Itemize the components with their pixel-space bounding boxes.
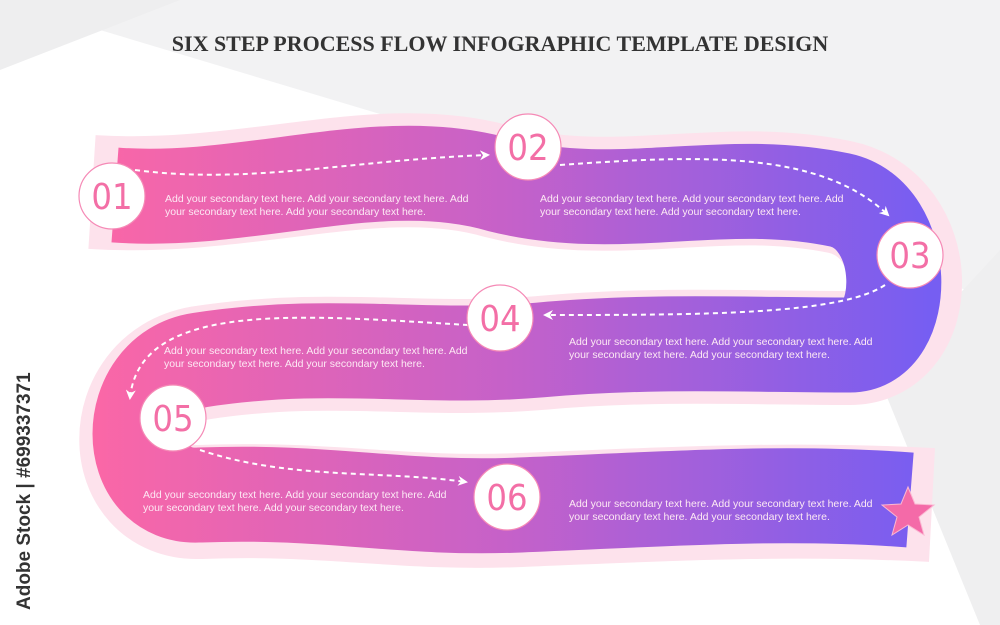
step texts: your secondary text here. Add your secondary text here. (569, 511, 830, 523)
step texts: your secondary text here. Add your secondary text here. (143, 502, 404, 514)
step texts: your secondary text here. Add your secondary text here. (569, 349, 830, 361)
step texts: Add your secondary text here. Add your secondary text here. Add (540, 193, 844, 205)
step texts (143, 193, 873, 523)
ribbon (115, 173, 910, 506)
step texts: your secondary text here. Add your secondary text here. (540, 206, 801, 218)
step texts: Add your secondary text here. Add your secondary text here. Add (569, 336, 873, 348)
step texts: your secondary text here. Add your secondary text here. (164, 358, 425, 370)
title: SIX STEP PROCESS FLOW INFOGRAPHIC TEMPLATE DESIGN (172, 31, 828, 56)
step numbers: 02 (507, 128, 549, 169)
dashed arrows (130, 155, 888, 482)
step texts: Add your secondary text here. Add your secondary text here. Add (143, 489, 447, 501)
step circles (79, 114, 943, 530)
step numbers (91, 128, 931, 519)
step numbers: 06 (486, 478, 528, 519)
step numbers: 03 (889, 236, 931, 277)
step texts: Add your secondary text here. Add your secondary text here. Add (164, 345, 468, 357)
step texts: Add your secondary text here. Add your secondary text here. Add (569, 498, 873, 510)
icon: star (882, 487, 934, 535)
step numbers: 05 (152, 399, 194, 440)
step numbers: 01 (91, 177, 133, 218)
step texts: your secondary text here. Add your secondary text here. (165, 206, 426, 218)
step numbers: 04 (479, 299, 521, 340)
ribbon halo (92, 170, 932, 511)
step texts: Add your secondary text here. Add your secondary text here. Add (165, 193, 469, 205)
watermark id: Adobe Stock | #699337371 (14, 372, 35, 610)
